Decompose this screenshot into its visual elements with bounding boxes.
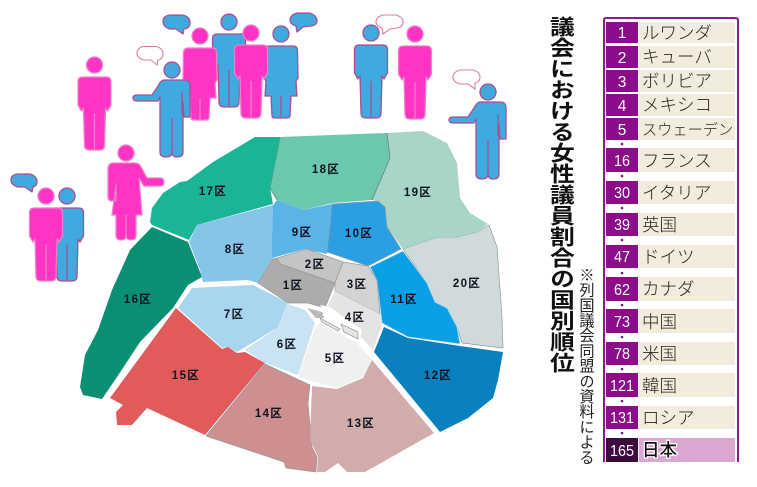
ranking table [604, 18, 738, 462]
district 15 [110, 308, 265, 435]
district 3: 3区 [347, 278, 367, 291]
dot [621, 304, 623, 306]
dot [621, 368, 623, 370]
person: pink man, far left [78, 57, 111, 150]
district 11: 11区 [390, 293, 418, 306]
row 2: キューバ [642, 47, 712, 67]
person: pink man, centre [234, 25, 268, 118]
district 14 [206, 364, 317, 472]
row 78 [606, 342, 735, 365]
row 3 [606, 70, 735, 92]
row 165 Japan: 日本 [642, 440, 677, 460]
person: blue man pointing, right [449, 84, 506, 179]
row 121 [606, 373, 735, 397]
dot [621, 175, 623, 177]
row 78: 米国 [642, 344, 677, 364]
district 7: 7区 [224, 308, 244, 321]
district 4 [307, 291, 382, 350]
row 39: 39 [614, 217, 630, 234]
district 8 [189, 205, 273, 283]
district 9: 9区 [292, 226, 312, 239]
row 3: 3 [618, 74, 626, 91]
row 4 [606, 94, 735, 116]
district 16 [80, 227, 202, 399]
row 5: スウェーデン [642, 122, 733, 139]
person: pink woman pointing [108, 145, 164, 240]
row 5 [606, 118, 735, 140]
district 8: 8区 [225, 243, 245, 256]
district 11 [370, 251, 460, 344]
district 6: 6区 [277, 338, 297, 351]
title: 議会における女性議員割合の国別順位 [547, 16, 574, 373]
district 17 [150, 137, 280, 240]
bubble: white far right [453, 70, 480, 89]
row 165 Japan: 165 [610, 443, 634, 460]
row 30 [606, 181, 735, 204]
district 20: 20区 [453, 277, 481, 290]
row 131 [606, 406, 735, 429]
row 131: 131 [610, 410, 634, 427]
district 16: 16区 [124, 293, 152, 306]
district 20 [403, 225, 503, 348]
person: blue woman [264, 26, 298, 118]
bubble: blue left [11, 174, 37, 192]
row 1: ルワンダ [642, 23, 712, 43]
row 5: 5 [618, 122, 626, 139]
dot [621, 207, 623, 209]
district 3 [335, 262, 380, 314]
district 12: 12区 [424, 369, 452, 382]
district 13: 13区 [347, 417, 375, 430]
district 9 [272, 200, 332, 258]
district 19 [372, 131, 488, 249]
dot [621, 336, 623, 338]
bubble: white [137, 46, 163, 65]
person: pink woman [183, 28, 217, 120]
source note: ※列国議会同盟の資料による [577, 267, 594, 465]
district 18: 18区 [312, 163, 340, 176]
row 2 [606, 46, 735, 68]
row 73: 73 [614, 314, 630, 331]
row 62 [606, 277, 735, 301]
row 1: 1 [618, 25, 626, 42]
people group [30, 14, 506, 281]
dot [621, 239, 623, 241]
row 73: 中国 [642, 312, 677, 332]
district 10: 10区 [345, 227, 373, 240]
district 2: 2区 [305, 258, 325, 271]
map: Paris arrondissements [80, 131, 503, 472]
row 62: カナダ [642, 279, 694, 299]
row 121: 121 [610, 378, 634, 395]
bubble: blue right [290, 13, 317, 32]
row 4: メキシコ [642, 95, 712, 115]
person: blue man behind [212, 14, 246, 107]
district 12 [374, 327, 503, 432]
district 18 [270, 133, 390, 210]
person: blue man, left pair [50, 188, 84, 281]
row 121: 韓国 [642, 376, 677, 396]
district 15: 15区 [172, 369, 200, 382]
person: pink man, right pair [398, 26, 432, 119]
row 62: 62 [614, 282, 630, 299]
person: blue man pointing [133, 62, 190, 157]
district 2 [277, 249, 343, 283]
district 6 [245, 304, 315, 375]
row 2: 2 [618, 50, 626, 67]
district 13 [310, 360, 434, 472]
row 47: ドイツ [642, 247, 694, 267]
row 4: 4 [618, 98, 627, 115]
row 78: 78 [614, 346, 630, 363]
dot [621, 272, 623, 274]
row 131: ロシア [642, 408, 694, 428]
row 39: 英国 [642, 215, 677, 235]
row 16 [606, 148, 735, 172]
district 4: 4区 [345, 311, 365, 324]
row 47: 47 [614, 249, 630, 266]
district 5 [298, 323, 372, 388]
district 1: 1区 [283, 279, 303, 292]
row 165 Japan [606, 438, 735, 462]
row 3: ボリビア [642, 71, 712, 91]
person: blue man, right pair [354, 25, 388, 118]
person: pink man, left pair [30, 188, 62, 281]
bubble: white centre right [376, 15, 403, 34]
dot [621, 143, 623, 145]
dot [621, 432, 623, 434]
bubble: blue top [163, 15, 190, 34]
district 1 [258, 258, 335, 308]
row 1 [606, 22, 735, 43]
row 16: フランス [642, 151, 712, 171]
speech bubbles [11, 13, 480, 192]
table frame [604, 18, 738, 462]
district 10 [327, 201, 401, 266]
row 47 [606, 245, 735, 268]
district 14: 14区 [255, 407, 283, 420]
district 7 [178, 285, 288, 352]
row 16: 16 [614, 153, 630, 170]
row 30: イタリア [642, 183, 711, 203]
row 73 [606, 309, 735, 333]
district 5: 5区 [325, 352, 345, 365]
row 39 [606, 213, 735, 236]
district 17: 17区 [199, 185, 227, 198]
dot [621, 400, 623, 402]
district 19: 19区 [404, 186, 432, 199]
row 30: 30 [614, 185, 630, 202]
